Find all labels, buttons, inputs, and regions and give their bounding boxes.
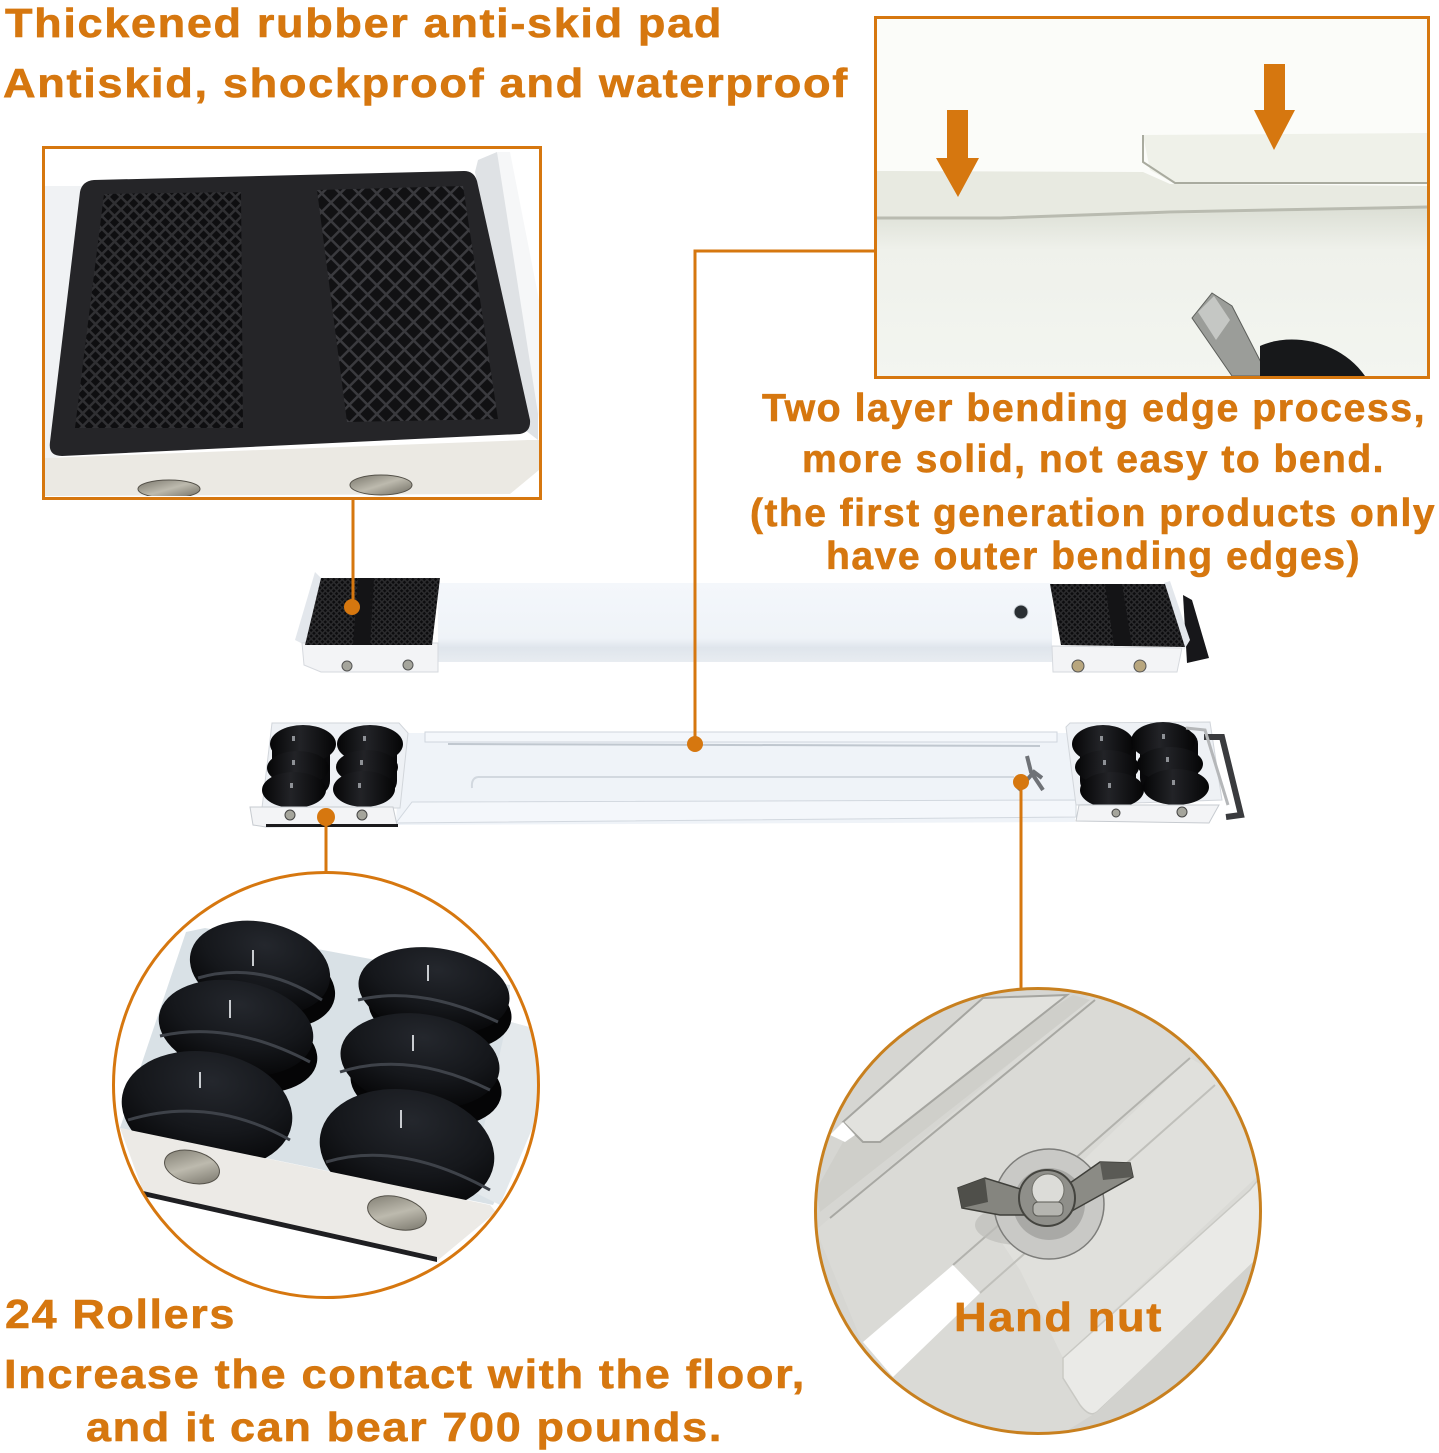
heading: anti-skid pad: Antiskid, shockproof and waterproof (3, 60, 849, 106)
caption: bending edge process (750, 387, 1436, 578)
product: upper bar with rubber pads (295, 572, 1209, 672)
label: hand nut: Hand nut (954, 1294, 1163, 1340)
caption: bending edge process: (the first generation products only (750, 492, 1436, 535)
panel: rubber pad close-up (44, 148, 540, 498)
caption: bending edge process: Two layer bending edge process, (762, 387, 1426, 430)
connector: rollers to circle (317, 808, 335, 872)
heading: anti-skid pad: Thickened rubber anti-skid pad (5, 0, 723, 46)
caption: bending edge process: more solid, not easy to bend. (802, 438, 1385, 481)
panel: hand nut close-up circle (816, 988, 1262, 1435)
panel: two layer bending edge close-up (876, 18, 1428, 378)
caption: 24 rollers (4, 1291, 806, 1450)
caption: 24 rollers: Increase the contact with the floor, (4, 1351, 806, 1397)
mini rollers (262, 722, 1209, 808)
panel: rollers close-up circle (112, 872, 540, 1298)
caption: bending edge process: have outer bending edges) (826, 535, 1361, 578)
caption: 24 rollers: and it can bear 700 pounds. (86, 1404, 723, 1450)
wheel shadows (176, 977, 512, 1121)
arrow: outer bending edge (936, 110, 979, 197)
heading: anti-skid pad (3, 0, 849, 106)
connector: hand nut to circle (1013, 774, 1029, 990)
connector: pad panel to bar (344, 498, 360, 615)
product: lower bar with rollers (250, 722, 1241, 827)
connector: bending edge panel to bar (687, 251, 875, 752)
caption: 24 rollers: 24 Rollers (5, 1291, 236, 1337)
arrow: inner bending edge (1254, 64, 1295, 150)
